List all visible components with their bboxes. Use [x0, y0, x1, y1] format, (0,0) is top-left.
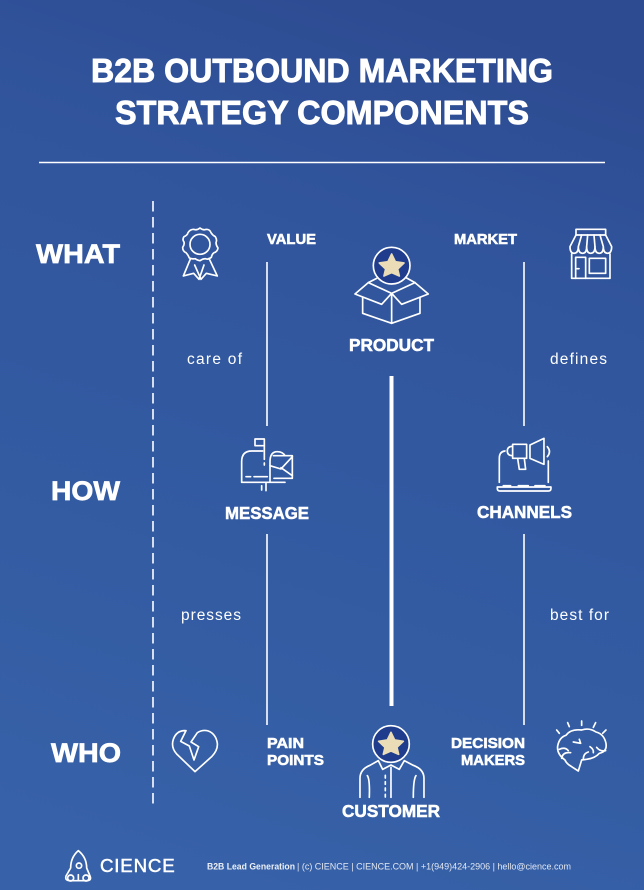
icon: rosette [183, 228, 218, 279]
label: CUSTOMER: CUSTOMER [342, 801, 440, 821]
label: DECISION MAKERS [451, 736, 525, 769]
label: PRODUCT: PRODUCT [349, 335, 434, 355]
footer text: | (c) CIENCE | CIENCE.COM | +1(949)424-2906 | hello@cience.com [297, 860, 571, 872]
icon: megaphone and laptop [497, 438, 551, 491]
label: presses: presses [181, 607, 241, 624]
connector lines [267, 262, 524, 725]
label: PAIN POINTS: PAIN [267, 736, 304, 752]
icon: brain with rays [557, 721, 606, 771]
label: PAIN POINTS: POINTS [267, 753, 324, 769]
row label: WHAT: WHAT [36, 239, 120, 269]
central thick connector [390, 376, 394, 706]
row label: WHO: WHO [51, 738, 121, 768]
icon: mailbox with envelope [242, 439, 292, 491]
label: MARKET: MARKET [454, 232, 517, 248]
footer text: B2B Lead Generation [207, 860, 295, 872]
label: PAIN POINTS [267, 736, 324, 769]
label: VALUE: VALUE [267, 232, 316, 248]
label: DECISION MAKERS: DECISION [451, 736, 525, 752]
icon: product box with star [355, 247, 428, 323]
title: B2B OUTBOUND MARKETING [91, 52, 553, 89]
logo: CIENCE [66, 851, 175, 881]
label: DECISION MAKERS: MAKERS [461, 753, 525, 769]
icon: customer with star [360, 726, 424, 797]
logo: CIENCE: CIENCE [100, 855, 175, 876]
row label: HOW: HOW [51, 476, 120, 506]
label: care of: care of [187, 351, 243, 368]
title [91, 52, 553, 131]
label: CHANNELS: CHANNELS [477, 502, 572, 522]
label: defines: defines [550, 351, 607, 368]
title: STRATEGY COMPONENTS [115, 94, 529, 131]
icon: storefront [570, 229, 612, 278]
icon: broken heart [173, 730, 217, 772]
label: MESSAGE: MESSAGE [225, 503, 309, 523]
label: best for: best for [550, 607, 609, 624]
dashed separator [152, 201, 154, 808]
